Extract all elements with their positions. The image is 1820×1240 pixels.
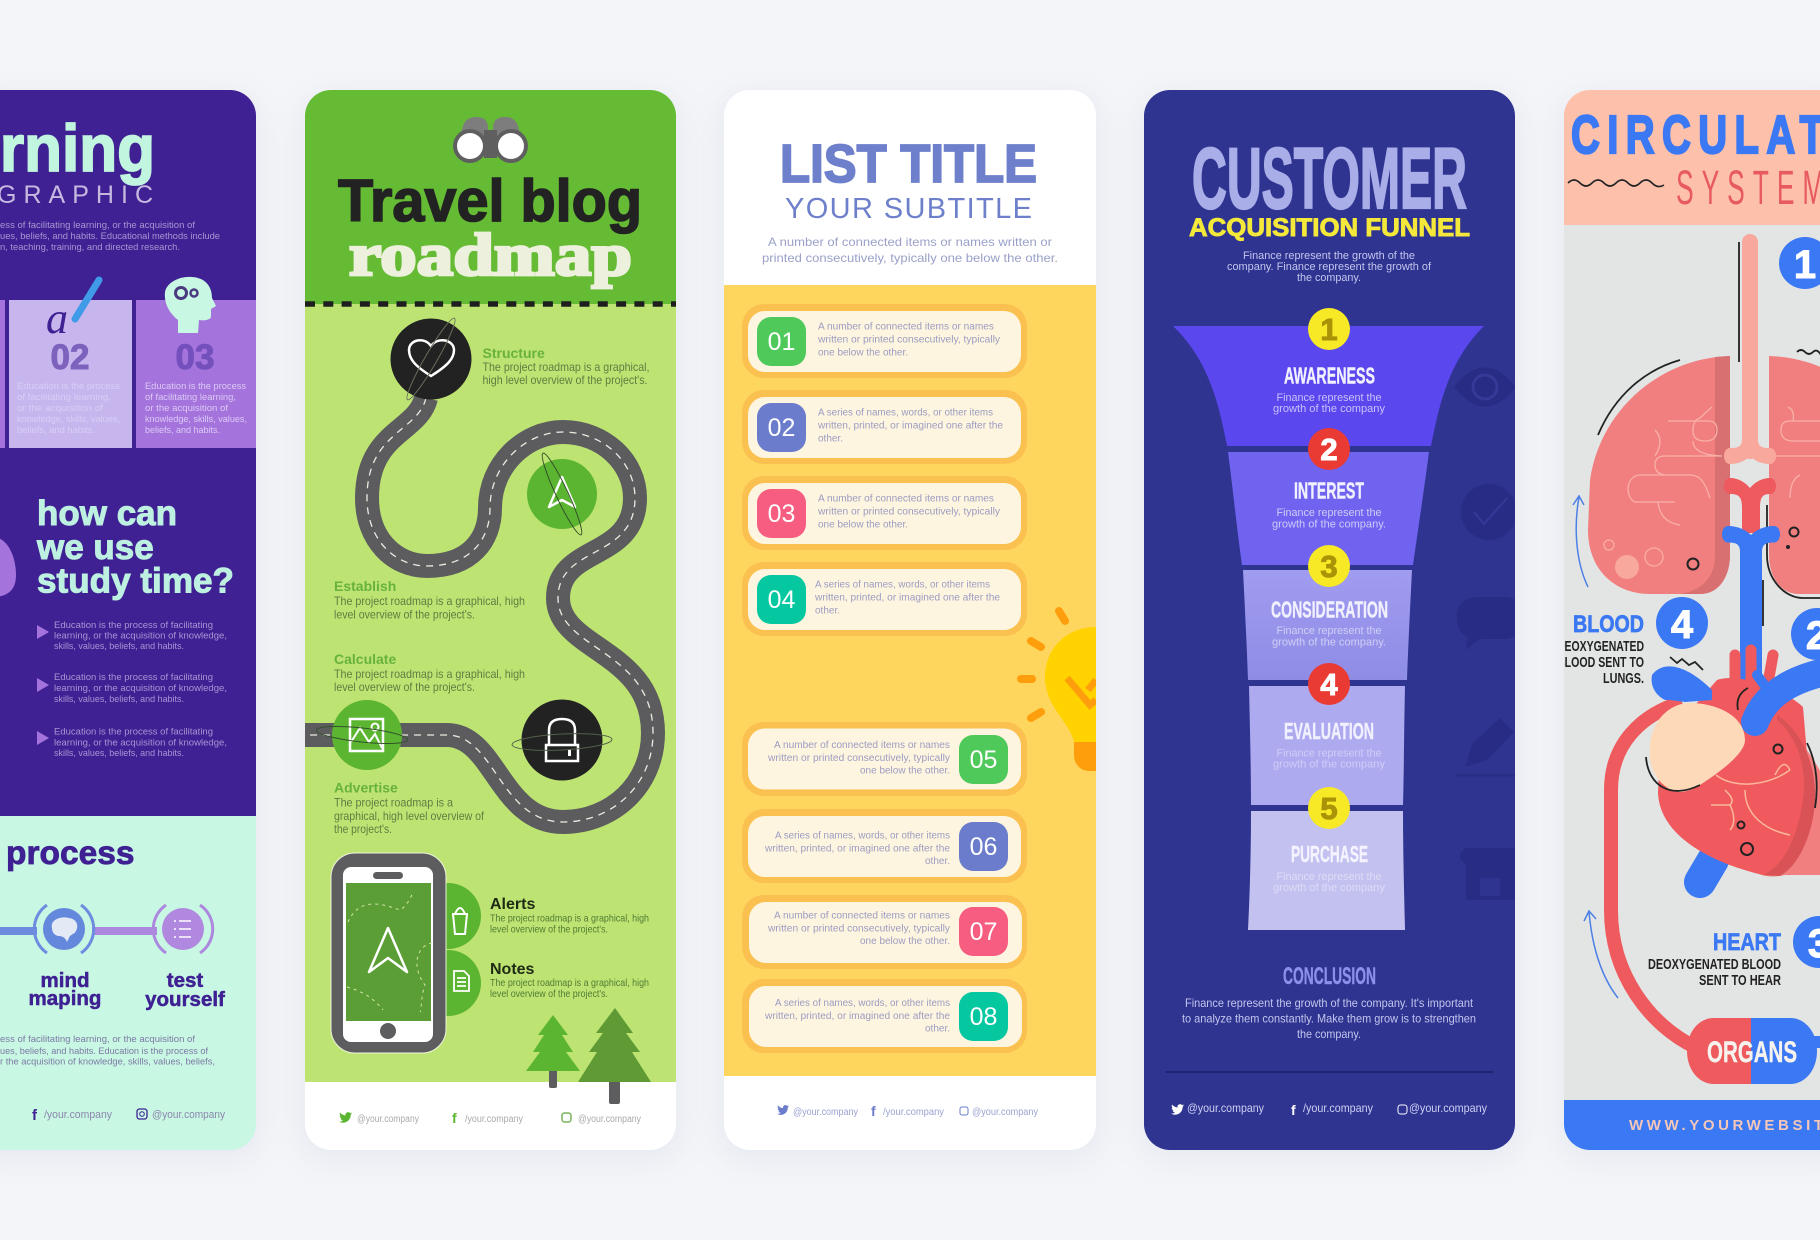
item 04 (742, 562, 1027, 636)
intro text: ess of facilitating learning, or the acquisition of (0, 220, 195, 231)
item 06 (742, 809, 1027, 883)
item 05: A number of connected items or names (774, 740, 950, 751)
text: calculate: The project roadmap is a graphical, high (334, 667, 525, 681)
number 2 (1791, 608, 1820, 660)
item 08: written, printed, or imagined one after the (764, 1011, 950, 1022)
item 03: written or printed consecutively, typically (817, 506, 1000, 518)
description: printed consecutively, typically one below the other. (762, 251, 1058, 265)
item 08: A series of names, words, or other items (775, 998, 950, 1009)
step 02 box: knowledge, skills, values, (17, 414, 120, 424)
item 07: written or printed consecutively, typically (767, 924, 950, 934)
item 07: 07 (970, 918, 997, 946)
step label: test yourself: test (167, 969, 203, 992)
website footer: WWW.YOURWEBSIT (1629, 1117, 1820, 1134)
step 02 box (9, 300, 132, 448)
number 1: 1 (1794, 243, 1816, 287)
title: customer: CUSTOMER (1192, 131, 1467, 227)
social footer: @your.company (972, 1106, 1039, 1118)
heart text: SENT TO HEAR (1699, 972, 1781, 989)
social footer: @your.company (578, 1114, 641, 1125)
social footer: /your.company (465, 1114, 523, 1125)
road (300, 398, 653, 822)
intro text (0, 220, 220, 253)
number badge 5 (1308, 787, 1350, 829)
title: list title: LIST TITLE (780, 134, 1037, 194)
dashed divider (305, 301, 676, 307)
process description: ues, beliefs, and habits. Education is the process of (0, 1046, 208, 1057)
step 03 box: or the acquisition of (145, 403, 228, 413)
funnel stage 2 (1228, 452, 1429, 565)
number badge 2 (1308, 428, 1350, 470)
item 04: written, printed, or imagined one after the (814, 592, 1000, 604)
icon: test yourself (153, 905, 213, 953)
icon: lock marker (512, 700, 612, 780)
text: notes: The project roadmap is a graphical, high (490, 978, 649, 989)
step 03 box (136, 300, 256, 448)
text: notes (490, 961, 649, 1000)
conclusion text: Finance represent the growth of the company. It's important (1185, 996, 1474, 1010)
text: advertise: graphical, high level overview of (334, 809, 485, 823)
process description: r the acquisition of knowledge, skills, values, beliefs, (0, 1056, 215, 1068)
step 03 box: of facilitating learning, (145, 392, 236, 402)
funnel stage 2: INTEREST (1294, 478, 1364, 504)
social footer: @your.company (357, 1114, 419, 1125)
funnel stage 2: growth of the company. (1272, 518, 1386, 530)
icon: binoculars (453, 117, 528, 163)
social footer: f (452, 1110, 457, 1126)
item 07 (742, 895, 1027, 969)
scalloped tabs (446, 883, 481, 1016)
subtitle: infographic: GRAPHIC (0, 181, 153, 209)
bullet list: learning, or the acquisition of knowledge, (54, 738, 227, 748)
description (762, 235, 1058, 265)
text: alerts (490, 896, 649, 936)
funnel stage 2: Finance represent the (1276, 507, 1382, 519)
number badge 4: 4 (1320, 667, 1338, 702)
step label: mind mapping: mind (41, 969, 89, 992)
social footer: f (32, 1107, 38, 1124)
number badge 3: 3 (1320, 549, 1338, 584)
funnel stage 5: Finance represent the (1276, 871, 1382, 883)
bullet list: skills, values, beliefs, and habits. (54, 641, 184, 652)
step label: mind mapping (29, 969, 101, 1010)
flow arrow lower (1584, 911, 1618, 998)
step 02 box: Education is the process (17, 381, 120, 391)
side icon: store (1460, 848, 1520, 900)
item 06: 06 (970, 833, 997, 861)
item 05 (742, 722, 1027, 796)
step 02 box: beliefs, and habits. (17, 425, 95, 435)
conclusion text (1182, 996, 1476, 1041)
bullet list: Education is the process of facilitating (54, 672, 213, 683)
heading: conclusion: CONCLUSION (1283, 963, 1376, 990)
item 04: A series of names, words, or other items (815, 580, 990, 590)
step 02 box: or the acquisition of (17, 403, 103, 413)
funnel stage 1: AWARENESS (1284, 362, 1375, 388)
bullet list: learning, or the acquisition of knowledge, (54, 630, 227, 642)
panel: learning infographic (0, 90, 256, 1150)
bullet list: Education is the process of facilitating (54, 726, 213, 738)
social footer: f (871, 1103, 876, 1119)
heading: process: process (6, 835, 134, 872)
funnel stage 5: PURCHASE (1291, 841, 1368, 867)
number 1 (1779, 237, 1820, 289)
icon: small tree (526, 1015, 580, 1088)
conclusion text: to analyze them constantly. Make them grow is to strengthen (1182, 1012, 1476, 1026)
blood text: LUNGS. (1603, 670, 1644, 687)
item 01: 01 (768, 328, 795, 356)
funnel stage 1: growth of the company (1273, 403, 1385, 415)
trachea (1724, 234, 1776, 464)
text: calculate: Calculate (334, 651, 396, 667)
item 06: other. (925, 856, 950, 867)
text: establish: The project roadmap is a graphical, high (334, 594, 525, 608)
text: establish (334, 578, 525, 622)
conclusion text: the company. (1297, 1027, 1361, 1041)
description: company. Finance represent the growth of (1227, 261, 1432, 273)
description (1227, 250, 1432, 284)
blood text: BLOOD SENT TO (1557, 654, 1644, 671)
text: structure (482, 348, 648, 386)
step 03 box: beliefs, and habits. (145, 425, 220, 435)
process description (0, 1034, 215, 1068)
text: notes: Notes (490, 961, 535, 978)
side icon: check (1461, 484, 1517, 540)
bullet list: skills, values, beliefs, and habits. (54, 694, 184, 705)
icon: handwriting pencil (46, 280, 99, 343)
side icon: eye (1454, 368, 1516, 406)
social footer: /your.company (1303, 1101, 1373, 1115)
text: advertise: The project roadmap is a (334, 796, 453, 810)
item 03: one below the other. (818, 520, 908, 530)
step label: mind mapping: maping (29, 987, 101, 1010)
icon: mind mapping (34, 905, 94, 953)
heart (1646, 650, 1820, 882)
item 03 (742, 476, 1027, 550)
description: Finance represent the growth of the (1243, 250, 1415, 262)
step label: test yourself (145, 973, 226, 1010)
icon: navigation marker (527, 451, 597, 537)
bullet list: learning, or the acquisition of knowledge, (54, 683, 227, 694)
item 01 (742, 304, 1027, 378)
panel: travel blog roadmap (300, 90, 676, 1150)
heart text: HEART (1713, 929, 1781, 956)
funnel stage 3: growth of the company. (1272, 636, 1386, 648)
side icon: chat (1457, 597, 1523, 650)
panel: customer acquisition funnel (1144, 90, 1523, 1150)
funnel stage 1 (1173, 326, 1484, 446)
organs pill (1687, 1018, 1820, 1084)
funnel stage 4 (1249, 686, 1405, 805)
social footer: f (1291, 1102, 1296, 1118)
number badge 5: 5 (1320, 791, 1338, 826)
step 02 box: of facilitating learning, (17, 392, 111, 402)
icon: light bulb (1021, 611, 1096, 771)
step 03 box: Education is the process (145, 381, 246, 391)
text: alerts: Alerts (490, 896, 535, 913)
subtitle: YOUR SUBTITLE (785, 193, 1032, 225)
decorative blob (0, 537, 16, 597)
step 01 box sliver (0, 300, 5, 448)
text: advertise (334, 780, 485, 836)
item 02: 02 (768, 414, 795, 442)
red vessel (1724, 478, 1776, 533)
organ pipe (1611, 702, 1695, 1047)
heading: how can we use study time: study time? (37, 562, 234, 600)
item 01: one below the other. (818, 348, 908, 358)
social footer: @your.company (152, 1109, 225, 1121)
text: establish: level overview of the project's. (334, 608, 475, 622)
funnel stage 4: EVALUATION (1284, 718, 1374, 744)
step 03 box: knowledge, skills, values, (145, 414, 247, 424)
icon: handwriting pencil: a (46, 294, 68, 343)
text: establish: Establish (334, 578, 396, 594)
heading: how can we use study time: we use (36, 528, 154, 567)
item 01: A number of connected items or names (818, 322, 994, 332)
funnel stage 5 (1248, 811, 1405, 930)
item 02: A series of names, words, or other items (818, 408, 993, 418)
item 05: written or printed consecutively, typically (767, 753, 950, 764)
item 07: A number of connected items or names (774, 910, 950, 922)
bullet list: Education is the process of facilitating (54, 620, 213, 631)
item 03: 03 (768, 500, 795, 528)
icon: big tree (578, 1008, 651, 1104)
text: structure: The project roadmap is a graphical, (482, 360, 650, 374)
text: advertise: Advertise (334, 780, 398, 796)
social footer: /your.company (44, 1109, 112, 1121)
intro text: n, teaching, training, and directed research. (0, 242, 180, 253)
text: structure: Structure (482, 345, 545, 361)
number badge 1 (1308, 308, 1350, 350)
heading: how can we use study time: how can (37, 494, 177, 533)
social footer: @your.company (1409, 1101, 1487, 1115)
title: roadmap: roadmap (349, 222, 632, 288)
flow arrow upper (1573, 496, 1588, 587)
funnel stage 3: Finance represent the (1276, 625, 1382, 637)
panel: circulatory system (1557, 90, 1820, 1150)
blood text: BLOOD (1573, 611, 1644, 638)
social footer: @your.company (1187, 1101, 1264, 1115)
text: advertise: the project's. (334, 822, 392, 836)
panel: list infographic (724, 90, 1096, 1150)
item 02: other. (818, 434, 843, 444)
item 06: written, printed, or imagined one after the (764, 844, 950, 854)
item 08: other. (925, 1024, 950, 1034)
item 02 (742, 390, 1027, 464)
description: A number of connected items or names written or (768, 235, 1052, 249)
funnel stage 4: Finance represent the (1276, 748, 1382, 760)
funnel stage 1: Finance represent the (1276, 392, 1382, 404)
number badge 1: 1 (1320, 312, 1338, 347)
funnel stage 4: growth of the company (1273, 758, 1385, 770)
text: calculate: level overview of the project's. (334, 680, 475, 694)
item 01: written or printed consecutively, typically (817, 334, 1000, 346)
icon: bag (453, 908, 467, 934)
funnel stage 3: CONSIDERATION (1271, 596, 1388, 622)
item 08 (742, 979, 1027, 1053)
lungs (1588, 242, 1820, 626)
number badge 2: 2 (1320, 432, 1338, 467)
item 06: A series of names, words, or other items (775, 830, 950, 842)
icon: phone (331, 853, 446, 1053)
title: travel blog: Travel blog (338, 168, 642, 234)
blood text (1557, 611, 1644, 687)
item 03: A number of connected items or names (818, 494, 994, 504)
item 02: written, printed, or imagined one after the (817, 420, 1003, 432)
process connector (0, 927, 157, 935)
squiggle (1568, 180, 1664, 187)
text: alerts: level overview of the project's. (490, 924, 608, 936)
social footer (1171, 1101, 1487, 1118)
heart text (1648, 929, 1781, 989)
text: structure: high level overview of the project's. (482, 373, 648, 387)
number badge 3 (1308, 545, 1350, 587)
title: learning: rning (0, 111, 155, 185)
blood text: DEOXYGENATED (1557, 638, 1644, 655)
number 4: 4 (1671, 603, 1694, 647)
social footer (339, 1110, 641, 1126)
social footer: /your.company (883, 1106, 945, 1118)
item 05: one below the other. (860, 766, 950, 776)
item 08: 08 (970, 1003, 997, 1031)
blue vessel (1722, 526, 1780, 680)
social footer (32, 1108, 225, 1120)
number 4 (1656, 597, 1708, 649)
item 07: one below the other. (860, 936, 950, 947)
funnel stage 3 (1243, 570, 1412, 680)
item 04: 04 (768, 586, 795, 614)
item 05: 05 (970, 746, 997, 774)
number badge 4 (1308, 663, 1350, 705)
heading: how can we use study time (36, 494, 234, 600)
step label: test yourself: yourself (145, 988, 225, 1011)
step 02 box: 02 (51, 338, 89, 377)
text: alerts: The project roadmap is a graphical, high (490, 914, 649, 924)
social footer: @your.company (793, 1106, 859, 1118)
item 04: other. (815, 606, 840, 616)
bullet list (37, 620, 227, 759)
icon: document (454, 971, 469, 991)
bullet list: skills, values, beliefs, and habits. (54, 748, 184, 759)
subtitle: acquisition funnel: ACQUISITION FUNNEL (1189, 214, 1470, 242)
social footer (777, 1103, 1039, 1119)
step 03 box: 03 (176, 338, 214, 377)
icon: image marker (316, 700, 408, 770)
intro text: ues, beliefs, and habits. Educational methods include (0, 231, 220, 242)
funnel stage 5: growth of the company (1273, 882, 1385, 894)
icon: head with gears (165, 277, 216, 333)
description: the company. (1297, 272, 1361, 284)
side icon: pencil (1456, 718, 1516, 776)
process description: ess of facilitating learning, or the acquisition of (0, 1034, 195, 1045)
icon: heart marker (390, 315, 472, 403)
text: calculate (334, 651, 525, 694)
number 3 (1793, 916, 1820, 968)
text: notes: level overview of the project's. (490, 989, 608, 1000)
